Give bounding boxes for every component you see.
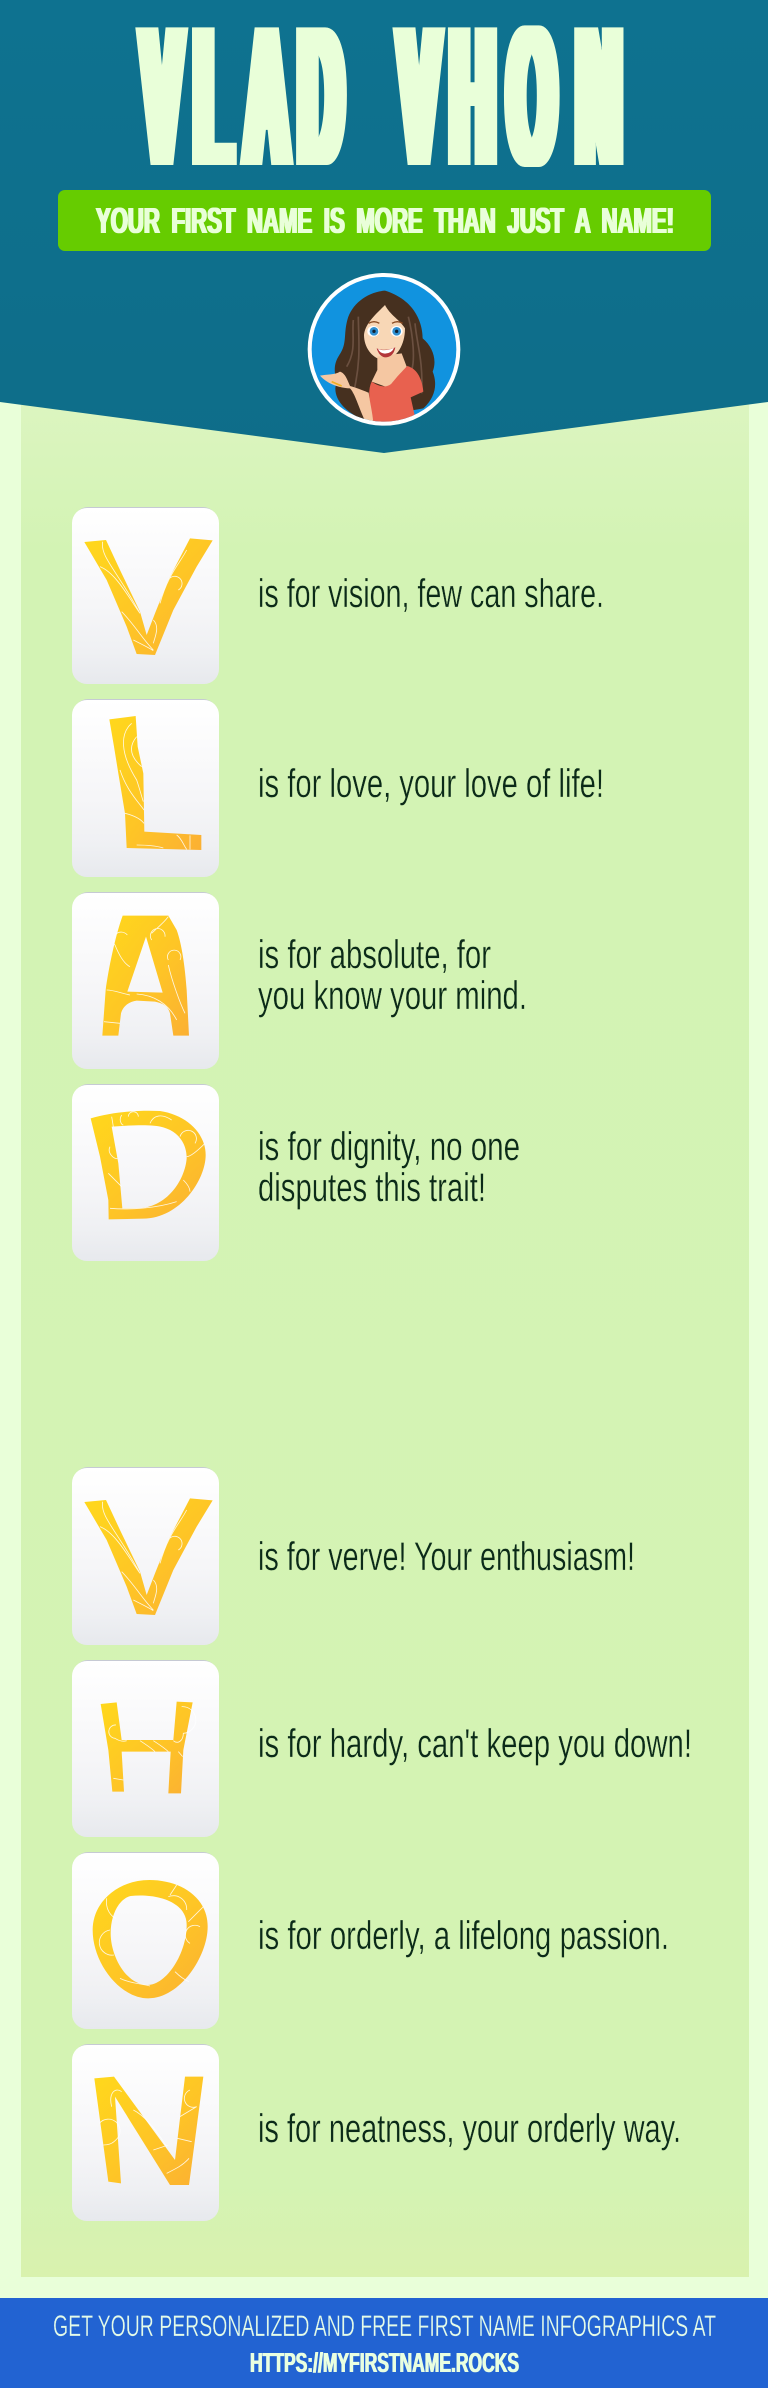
text: V second line: is for verve! Your enthusiasm! xyxy=(258,1535,635,1579)
header banner xyxy=(0,0,768,453)
avatar: woman in circle xyxy=(308,273,460,426)
subtitle banner xyxy=(58,190,711,251)
footer xyxy=(0,2298,768,2388)
text: D lines: disputes this trait! xyxy=(258,1166,486,1210)
text: A lines xyxy=(258,933,527,1018)
text: V line: is for vision, few can share. xyxy=(258,572,604,616)
letter card H xyxy=(72,1660,219,1837)
content panel xyxy=(21,400,749,2277)
text: A lines: is for absolute, for xyxy=(258,933,491,977)
text: A lines: you know your mind. xyxy=(258,974,527,1018)
letter card A xyxy=(72,892,219,1069)
text: D lines xyxy=(258,1125,520,1210)
letter card O xyxy=(72,1852,219,2029)
letter card V second xyxy=(72,1467,219,1645)
letter card L xyxy=(72,699,219,877)
text: D lines: is for dignity, no one xyxy=(258,1125,520,1169)
letter card N xyxy=(72,2044,219,2221)
letter card D xyxy=(72,1084,219,1261)
text: L line: is for love, your love of life! xyxy=(258,762,604,806)
footer url: HTTPS://MYFIRSTNAME.ROCKS xyxy=(250,2347,519,2378)
letter card V xyxy=(72,507,219,684)
